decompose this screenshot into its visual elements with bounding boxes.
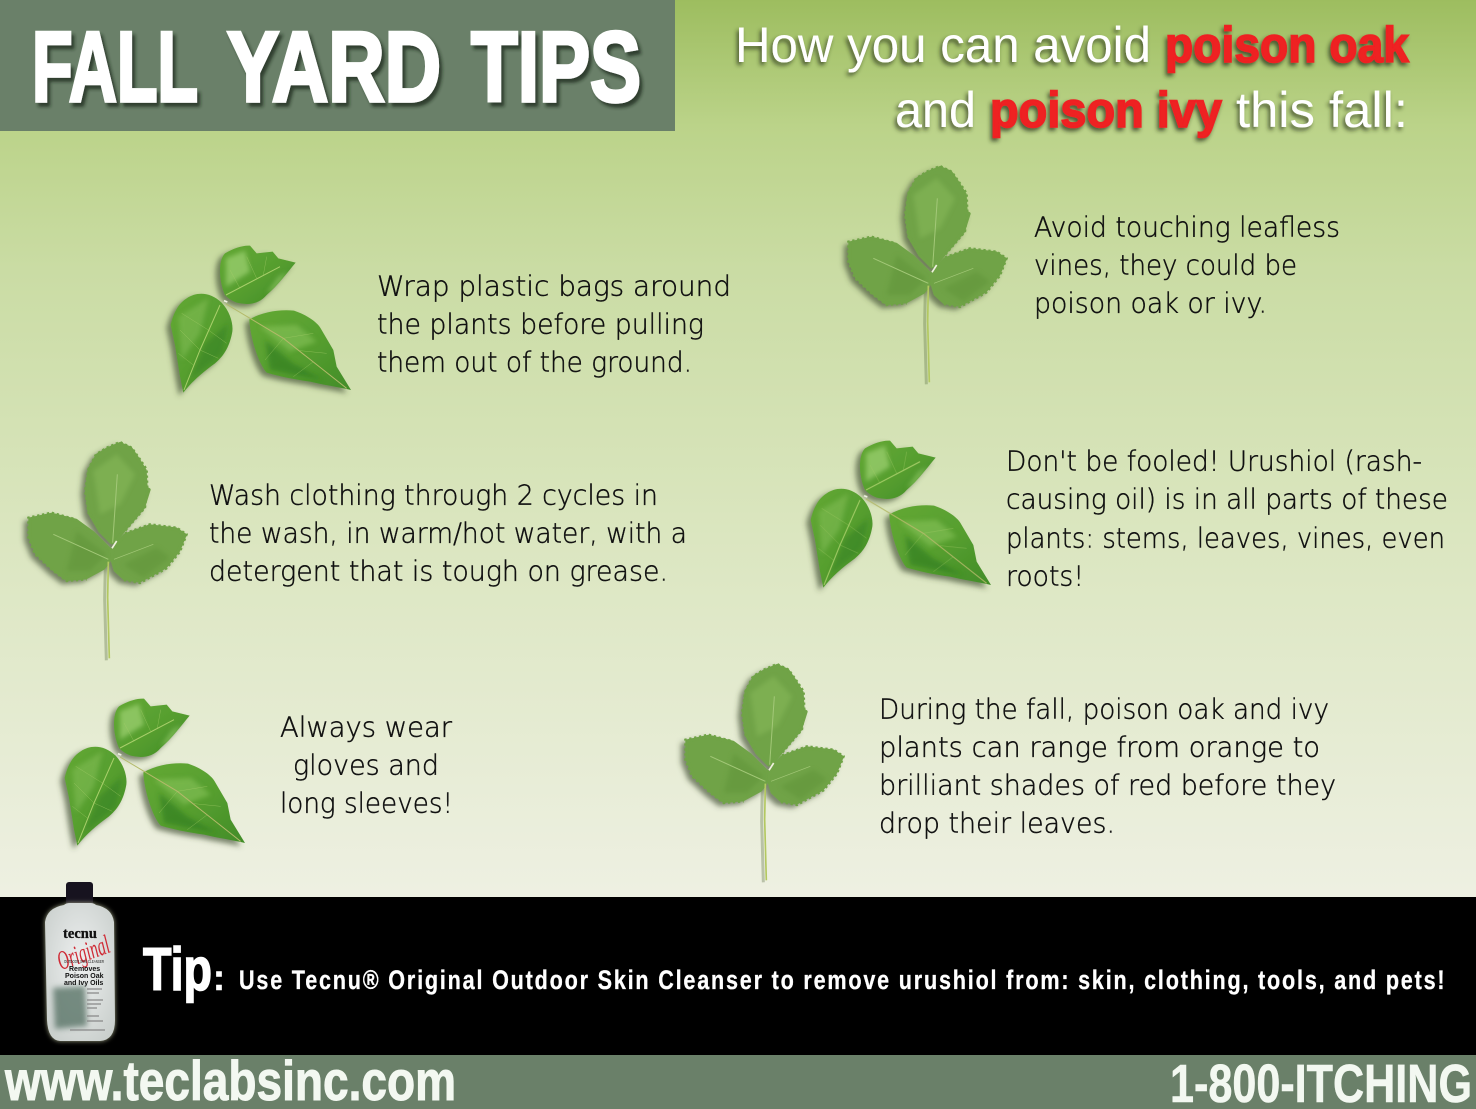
tip 3 text: [209, 478, 687, 587]
subtitle heading: [735, 17, 1409, 138]
title text: FALL: [32, 11, 198, 122]
tip 1 text: them out of the ground.: [377, 345, 692, 378]
footer band: [0, 1049, 1476, 1109]
black tip band: [0, 897, 1476, 1055]
tip 5 text: Always wear: [280, 710, 452, 743]
product bottle: Poison Oak: [65, 973, 104, 980]
icon: poison ivy leaf: [811, 441, 991, 588]
tip 6 text: brilliant shades of red before they: [879, 768, 1336, 801]
icon: poison oak leaf: [848, 166, 1007, 384]
product bottle: OUTDOOR SKIN CLEANSER: [64, 959, 104, 964]
tip 1 text: [377, 269, 731, 378]
tip 1 text: Wrap plastic bags around: [377, 269, 731, 302]
title text: YARD: [227, 11, 441, 122]
tip 2 text: Avoid touching leafless: [1034, 210, 1340, 243]
tip callout text: :: [213, 957, 225, 998]
tip 4 text: causing oil) is in all parts of these: [1006, 482, 1448, 515]
tip 1 text: the plants before pulling: [377, 307, 704, 340]
subtitle heading: How you can avoid: [735, 17, 1151, 73]
title banner: [0, 0, 675, 131]
subtitle heading: and: [895, 82, 976, 138]
icon: poison ivy leaf: [65, 699, 245, 846]
icon: poison ivy leaf: [171, 246, 351, 393]
tip 1: plastic bags: [171, 246, 731, 393]
tip 4 text: roots!: [1006, 559, 1084, 592]
tip 4 text: [1006, 444, 1448, 592]
tip 6 text: During the fall, poison oak and ivy: [879, 692, 1329, 725]
tip 5: gloves: [65, 699, 453, 846]
product bottle: Removes: [69, 966, 100, 973]
tip callout text: [143, 936, 1445, 1003]
tip 5 text: [280, 710, 453, 819]
tip 3: wash clothing: [28, 442, 687, 660]
tip 2 text: [1034, 210, 1340, 319]
tip 4: urushiol: [811, 441, 1448, 592]
tip callout text: Tip: [143, 936, 212, 1003]
tip 3 text: the wash, in warm/hot water, with a: [209, 516, 687, 549]
tip 2 text: vines, they could be: [1034, 248, 1297, 281]
subtitle heading: poison ivy: [990, 82, 1222, 138]
tip 3 text: detergent that is tough on grease.: [209, 554, 668, 587]
tip 6 text: [879, 692, 1336, 839]
tip 6 text: plants can range from orange to: [879, 730, 1320, 763]
tip 6: fall colours: [685, 664, 1336, 882]
tip 6 text: drop their leaves.: [879, 806, 1115, 839]
product bottle: Original: [53, 929, 114, 976]
tip 2 text: poison oak or ivy.: [1034, 286, 1267, 319]
icon: poison oak leaf: [28, 442, 187, 660]
tip 5 text: gloves and: [293, 748, 439, 781]
tip 4 text: plants: stems, leaves, vines, even: [1006, 521, 1445, 554]
title text: [32, 11, 641, 122]
product bottle: [45, 882, 115, 1041]
subtitle heading: poison oak: [1165, 17, 1409, 73]
icon: poison oak leaf: [685, 664, 844, 882]
title text: TIPS: [471, 11, 641, 122]
tip 4 text: Don't be fooled! Urushiol (rash-: [1006, 444, 1422, 477]
tip 3 text: Wash clothing through 2 cycles in: [209, 478, 658, 511]
subtitle heading: this fall:: [1236, 82, 1408, 138]
product bottle: and Ivy Oils: [64, 980, 103, 987]
tip callout text: Use Tecnu® Original Outdoor Skin Cleanser to remove urushiol from: skin, clothing, tools, and pets!: [239, 966, 1445, 996]
product bottle: tecnu: [63, 926, 97, 942]
tip 5 text: long sleeves!: [280, 786, 453, 819]
tip 2: leafless vines: [848, 166, 1340, 384]
